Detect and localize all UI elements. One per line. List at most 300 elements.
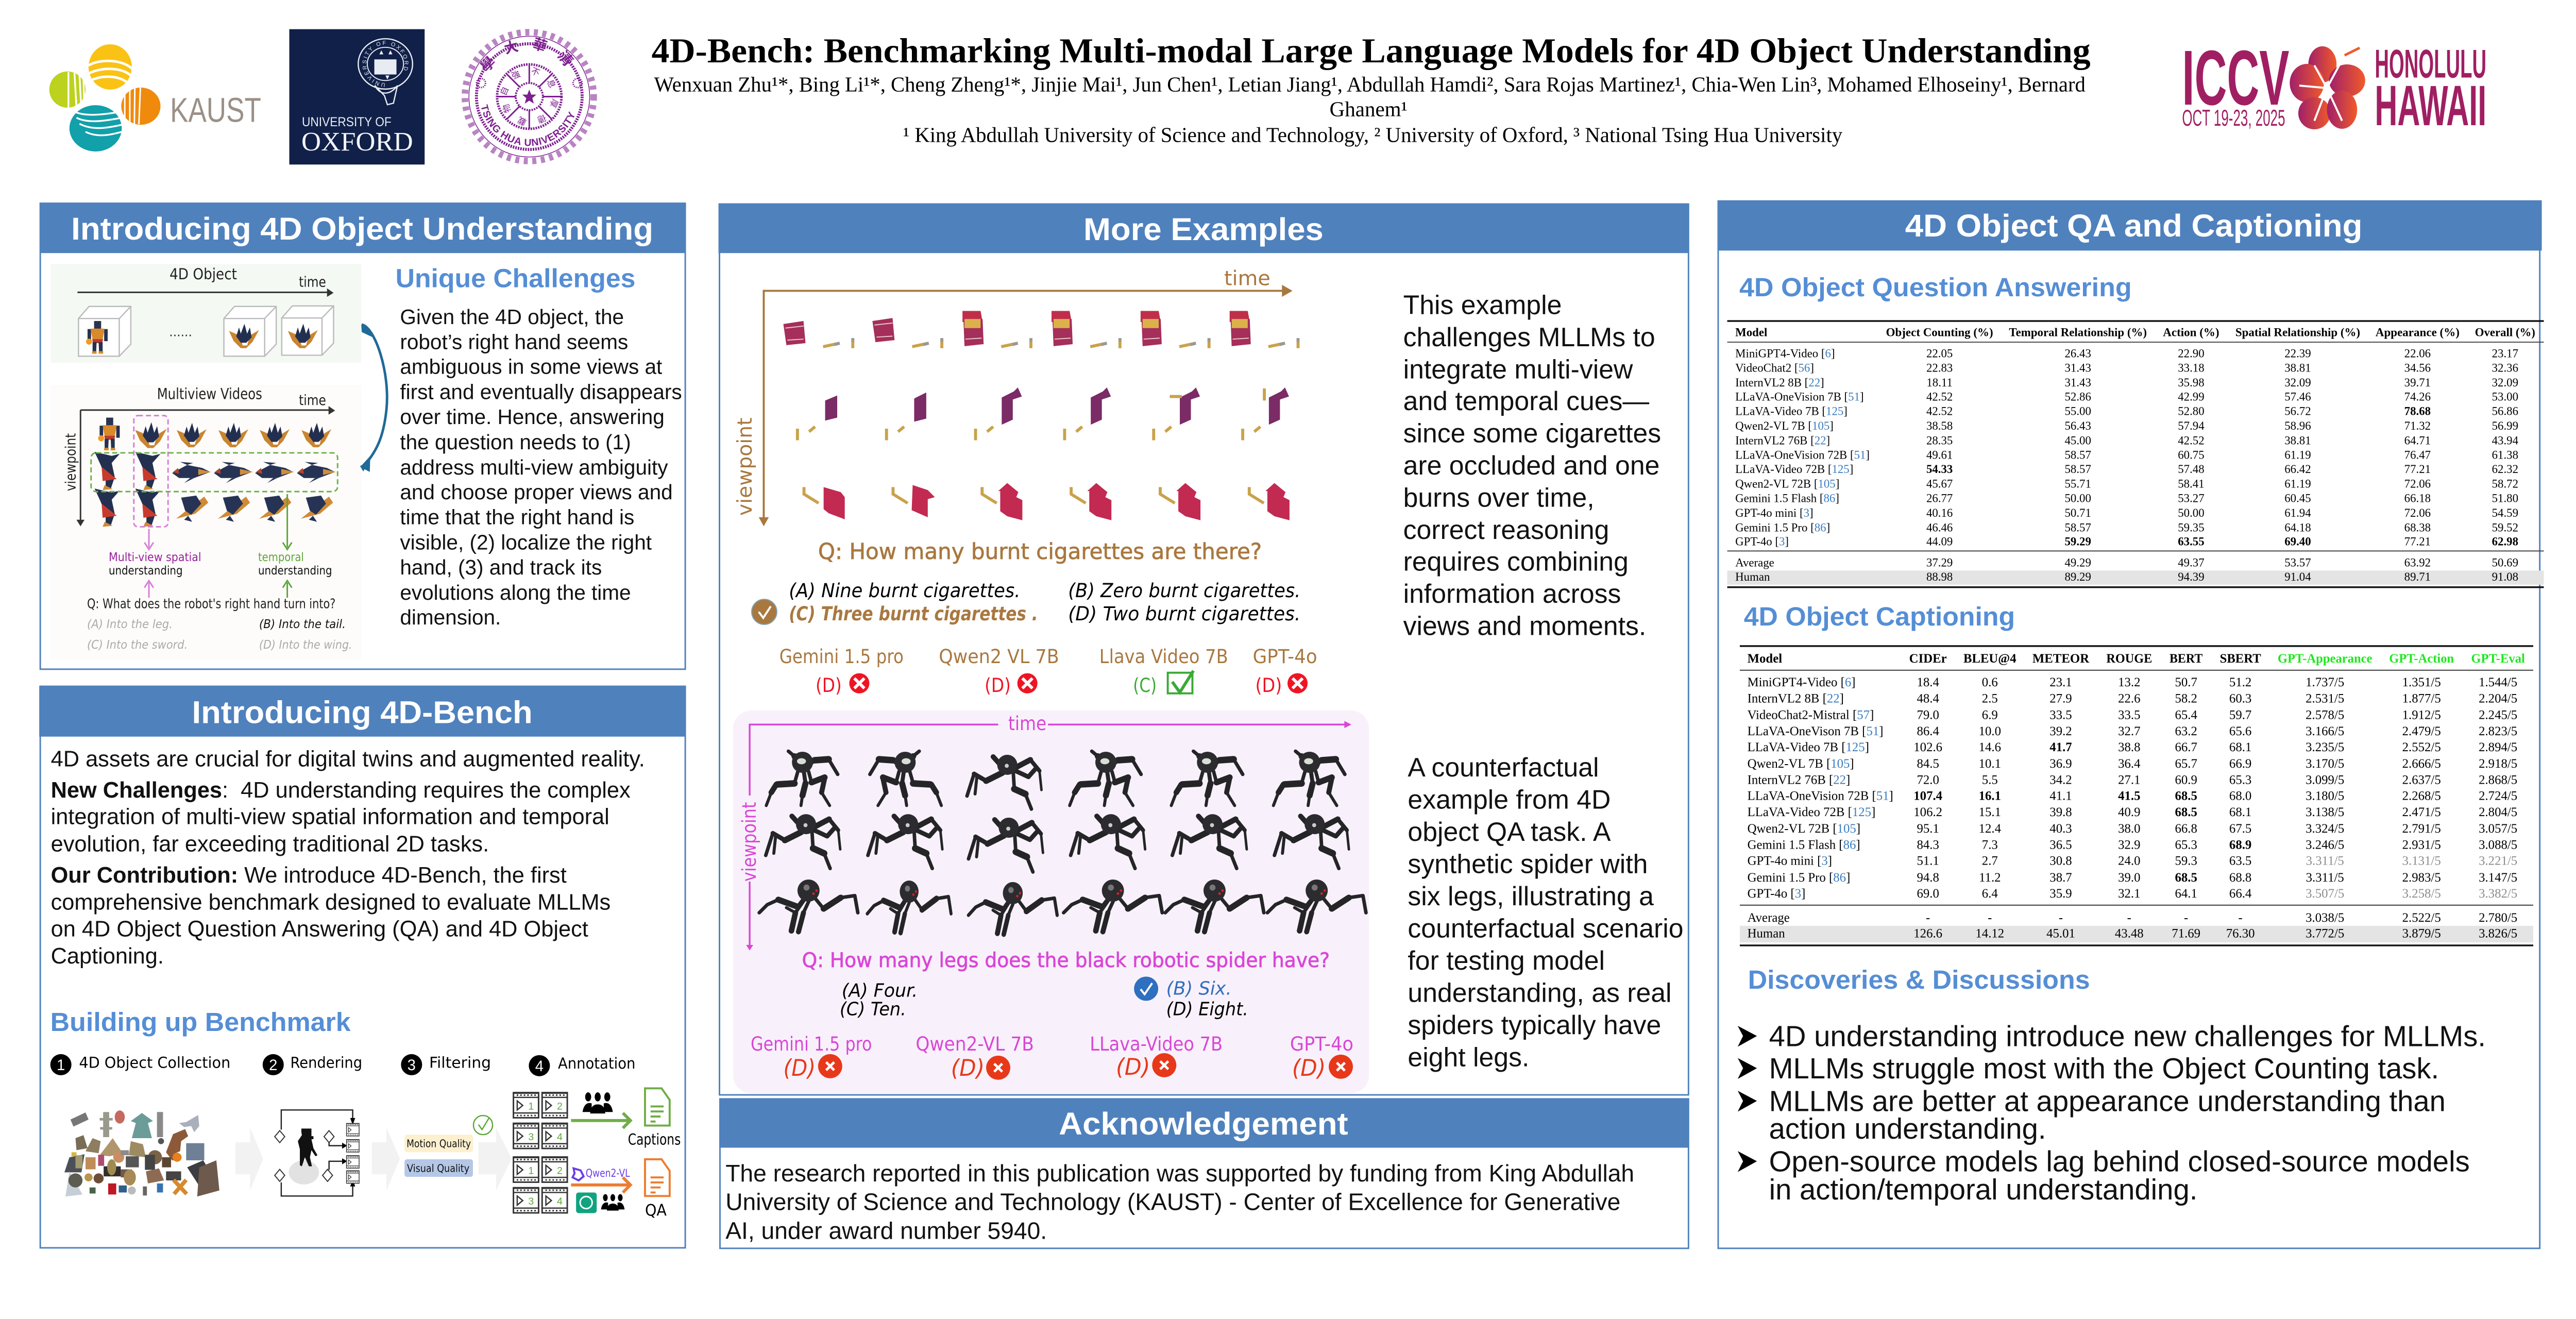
- table: captioning results: 68.1: [2229, 740, 2251, 754]
- table: captioning results: 3.099/5: [2306, 773, 2344, 787]
- table: captioning results: 23.1: [2049, 675, 2072, 689]
- table: QA results: Temporal Relationship (%): [2009, 326, 2147, 339]
- annotation: captions and QA: 2: [557, 1101, 563, 1112]
- table: QA results: 66.18: [2404, 492, 2431, 505]
- table: QA results: 57.94: [2178, 419, 2205, 432]
- table: QA results: 33.18: [2178, 362, 2205, 375]
- step labels: 2: [269, 1057, 277, 1074]
- table: captioning results: 3.057/5: [2479, 822, 2517, 836]
- logo: University of Oxford: UNIVERSITY OF OXFORD: [363, 41, 408, 87]
- table: QA results: Model: [1735, 326, 1767, 339]
- logo: KAUST: [49, 44, 261, 151]
- table: captioning results: 63.2: [2175, 724, 2197, 738]
- answer options: (B) Zero burnt cigarettes.: [1068, 580, 1300, 602]
- answer options: spider: (B) Six.: [1166, 978, 1232, 1000]
- table: QA results: 32.36: [2492, 362, 2518, 375]
- table: captioning results: 39.0: [2118, 871, 2141, 885]
- annotation: captions and QA: 1: [528, 1165, 534, 1176]
- model answers: (D): [985, 674, 1011, 697]
- figure: multiview videos: understanding: [258, 563, 332, 578]
- table: captioning results: 12.4: [1979, 822, 2002, 836]
- logo: ICCV Honolulu Hawaii: HAWAII: [2375, 74, 2486, 138]
- figure: multiview videos: time: [299, 393, 326, 409]
- model answers: spider: (D): [784, 1054, 816, 1081]
- logo: ICCV Honolulu Hawaii: [2182, 35, 2486, 138]
- table: QA results: 91.08: [2492, 570, 2518, 583]
- table: captioning results: 2.522/5: [2402, 911, 2441, 925]
- table: QA results: Qwen2-VL 7B [105]: [1735, 419, 1834, 432]
- table: QA results: 38.81: [2284, 434, 2311, 447]
- table: captioning results: 2.7: [1982, 854, 1998, 868]
- table: captioning results: 45.01: [2046, 926, 2075, 940]
- table: QA results: 62.98: [2492, 535, 2518, 548]
- table: captioning results: 7.3: [1982, 838, 1998, 852]
- text: cigarette example description: burns over time,: [1403, 482, 1595, 512]
- list: discoveries: action understanding.: [1769, 1112, 2046, 1145]
- table: captioning results: 35.9: [2049, 887, 2072, 901]
- table: QA results: LLaVA-Video 72B [125]: [1735, 463, 1853, 476]
- text: unique challenges body: address multi-view ambiguity: [400, 455, 668, 479]
- text: cigarette example description: and temporal cues—: [1403, 386, 1649, 416]
- table: captioning results: 22.6: [2118, 691, 2141, 705]
- table: QA results: 45.67: [1926, 477, 1953, 490]
- panel: introducing 4D object understanding: [40, 203, 688, 669]
- text: spider example description: for testing model: [1408, 945, 1605, 975]
- table: captioning results: 94.8: [1917, 871, 1939, 885]
- table: QA results: 61.19: [2284, 477, 2311, 490]
- table: captioning results: 2.780/5: [2479, 911, 2517, 925]
- answer options: spider: [840, 977, 1248, 1020]
- annotation: captions and QA: Captions: [628, 1131, 681, 1148]
- table: captioning results: 69.0: [1917, 887, 1939, 901]
- table: captioning results: 51.2: [2229, 675, 2251, 689]
- text: unique challenges body: visible, (2) localize the right: [400, 530, 652, 554]
- heading: acknowledgement: Acknowledgement: [1059, 1106, 1348, 1142]
- table: captioning results: 33.5: [2118, 708, 2141, 722]
- table: QA results: [1727, 321, 2544, 587]
- figure: multiview videos: (D) Into the wing.: [259, 637, 352, 652]
- table: captioning results: 2.531/5: [2306, 691, 2344, 705]
- text: unique challenges body: and choose proper views and: [400, 480, 673, 504]
- table: captioning results: 2.637/5: [2402, 773, 2441, 787]
- heading: 4D object question answering: 4D Object Question Answering: [1739, 273, 2132, 302]
- table: QA results: 32.09: [2284, 376, 2311, 389]
- text: spider example description: object QA task. A: [1408, 817, 1611, 847]
- table: QA results: 22.06: [2404, 347, 2431, 360]
- text: introduction body: evolution, far exceeding traditional 2D tasks.: [51, 832, 489, 856]
- table: captioning results: 3.324/5: [2306, 822, 2344, 836]
- model answers: spider: (D): [1116, 1053, 1150, 1080]
- table: captioning results: 68.8: [2229, 871, 2251, 885]
- table: QA results: 59.29: [2065, 535, 2091, 548]
- figure: 4D object: time: [299, 275, 326, 291]
- figure: spider counterfactual: [733, 711, 1369, 1093]
- table: QA results: 56.43: [2065, 419, 2091, 432]
- list: discoveries: in action/temporal understanding.: [1769, 1173, 2197, 1206]
- table: captioning results: 3.166/5: [2306, 724, 2344, 738]
- answer options: (C) Three burnt cigarettes .: [789, 603, 1038, 625]
- table: captioning results: 66.9: [2229, 757, 2251, 771]
- table: QA results: 55.71: [2065, 477, 2091, 490]
- table: captioning results: 1.544/5: [2479, 675, 2517, 689]
- step labels: 4D Object Collection: [79, 1054, 230, 1071]
- text: spider example description: example from 4D: [1408, 784, 1611, 814]
- table: captioning results: 3.826/5: [2479, 926, 2517, 940]
- table: captioning results: 51.1: [1917, 854, 1939, 868]
- list: discoveries: 4D understanding introduce new challenges for MLLMs.: [1769, 1020, 2486, 1052]
- text: acknowledgement body: The research reported in this publication was supported by funding from King Abdullah: [725, 1160, 1634, 1187]
- title: 4D-Bench: Benchmarking Multi-modal Large Language Models for 4D Object Understanding: [652, 31, 2091, 70]
- table: captioning results: 67.5: [2229, 822, 2251, 836]
- table: captioning results: 72.0: [1917, 773, 1939, 787]
- table: captioning results: 66.4: [2229, 887, 2252, 901]
- table: captioning results: 0.6: [1982, 675, 1998, 689]
- table: captioning results: 2.931/5: [2402, 838, 2441, 852]
- table: captioning results: Human: [1748, 926, 1785, 940]
- table: captioning results: 3.038/5: [2306, 911, 2344, 925]
- text: introduction body: integration of multi-view spatial information and temporal: [51, 805, 609, 830]
- table: captioning results: 2.666/5: [2402, 757, 2441, 771]
- table: QA results: 52.86: [2065, 390, 2091, 403]
- table: captioning results: [1740, 646, 2533, 945]
- model answers: spider: LLava-Video 7B: [1090, 1033, 1223, 1055]
- table: captioning results: 68.0: [2229, 789, 2251, 803]
- table: captioning results: 2.804/5: [2479, 805, 2517, 819]
- model answers: spider: (D): [1292, 1054, 1326, 1081]
- table: captioning results: 15.1: [1979, 805, 2001, 819]
- table: captioning results: 24.0: [2118, 854, 2141, 868]
- table: QA results: 77.21: [2404, 463, 2431, 476]
- text: unique challenges body: Given the 4D object, the: [400, 305, 624, 329]
- table: captioning results: 2.5: [1982, 691, 1998, 705]
- table: captioning results: 41.5: [2118, 789, 2141, 803]
- table: captioning results: 3.180/5: [2306, 789, 2344, 803]
- table: captioning results: Gemini 1.5 Pro [86]: [1748, 871, 1850, 885]
- table: captioning results: 3.879/5: [2402, 926, 2441, 940]
- table: QA results: Human: [1735, 570, 1770, 583]
- table: captioning results: 2.552/5: [2402, 740, 2441, 754]
- text: spider example description: synthetic spider with: [1408, 849, 1648, 878]
- table: QA results: 61.94: [2284, 506, 2311, 519]
- table: captioning results: 65.4: [2175, 708, 2197, 722]
- table: captioning results: 58.2: [2175, 691, 2197, 705]
- table: QA results: 53.57: [2284, 556, 2311, 569]
- table: QA results: 52.80: [2178, 405, 2205, 418]
- table: captioning results: 36.4: [2118, 757, 2141, 771]
- model answers: GPT-4o: [1253, 646, 1317, 668]
- table: captioning results: 3.131/5: [2402, 854, 2441, 868]
- panel: acknowledgement: [719, 1099, 1689, 1248]
- table: captioning results: GPT-4o mini [3]: [1748, 854, 1832, 868]
- table: QA results: 58.72: [2492, 477, 2518, 490]
- table: captioning results: 1.912/5: [2402, 708, 2441, 722]
- table: captioning results: 68.9: [2229, 838, 2251, 852]
- table: captioning results: 126.6: [1913, 926, 1942, 940]
- text: cigarette example description: requires combining: [1403, 546, 1629, 576]
- table: QA results: 38.81: [2284, 362, 2311, 375]
- table: QA results: 22.90: [2178, 347, 2205, 360]
- table: captioning results: 48.4: [1917, 691, 1939, 705]
- table: QA results: 62.32: [2492, 463, 2518, 476]
- table: captioning results: 2.983/5: [2402, 871, 2441, 885]
- table: captioning results: 36.9: [2049, 757, 2072, 771]
- panel: more examples: [719, 204, 1691, 1095]
- table: captioning results: 1.737/5: [2306, 675, 2344, 689]
- figure: cigarettes multi-view: time: [1224, 267, 1270, 291]
- table: captioning results: 68.5: [2175, 871, 2197, 885]
- heading: more examples: More Examples: [1083, 212, 1324, 247]
- text: unique challenges body: time that the right hand is: [400, 505, 634, 529]
- table: captioning results: 65.6: [2229, 724, 2251, 738]
- answer options: spider: (C) Ten.: [840, 999, 906, 1020]
- table: captioning results: 2.791/5: [2402, 822, 2441, 836]
- figure: multiview videos: Multi-view spatial: [109, 550, 201, 564]
- table: QA results: Spatial Relationship (%): [2235, 326, 2360, 339]
- annotation: captions and QA: Qwen2-VL: [586, 1167, 630, 1180]
- table: QA results: 59.52: [2492, 521, 2518, 534]
- table: captioning results: 1.351/5: [2402, 675, 2441, 689]
- table: captioning results: -: [1988, 911, 1992, 925]
- table: QA results: 31.43: [2065, 376, 2091, 389]
- table: captioning results: -: [2127, 911, 2131, 925]
- table: captioning results: 106.2: [1913, 805, 1942, 819]
- table: captioning results: 1.877/5: [2402, 691, 2441, 705]
- annotation: captions and QA: 3: [528, 1196, 534, 1207]
- table: QA results: 43.94: [2492, 434, 2519, 447]
- text: spider example description: counterfactual scenario: [1408, 913, 1683, 943]
- table: captioning results: LLaVA-OneVison 7B [51]: [1748, 724, 1884, 738]
- table: QA results: 78.68: [2404, 405, 2431, 418]
- table: captioning results: 40.3: [2049, 822, 2072, 836]
- figure: multiview videos: (B) Into the tail.: [259, 617, 346, 631]
- table: QA results: 60.75: [2178, 449, 2205, 462]
- list: discoveries: Open-source models lag behind closed-source models: [1769, 1145, 2470, 1177]
- table: QA results: LLaVA-Video 7B [125]: [1735, 405, 1848, 418]
- step labels: 4: [535, 1058, 544, 1075]
- table: QA results: 28.35: [1926, 434, 1953, 447]
- answer options: (D) Two burnt cigarettes.: [1068, 603, 1300, 625]
- table: captioning results: 59.7: [2229, 708, 2251, 722]
- logo: ICCV Honolulu Hawaii: ICCV: [2182, 35, 2289, 122]
- text: unique challenges body: the question needs to (1): [400, 430, 631, 454]
- table: captioning results: 39.8: [2049, 805, 2072, 819]
- table: QA results: 58.57: [2065, 521, 2091, 534]
- icon: correct answer check: [752, 599, 777, 624]
- table: QA results: 18.11: [1926, 376, 1953, 389]
- text: acknowledgement body: AI, under award number 5940.: [725, 1217, 1047, 1244]
- text: cigarette example description: challenges MLLMs to: [1403, 322, 1655, 352]
- table: QA results: VideoChat2 [56]: [1735, 362, 1814, 375]
- panel: 4D object QA and captioning: [1718, 200, 2544, 1248]
- table: captioning results: 2.245/5: [2479, 708, 2517, 722]
- table: QA results: 50.00: [2065, 492, 2091, 505]
- table: captioning results: LLaVA-Video 72B [125]: [1748, 805, 1875, 819]
- table: captioning results: Average: [1748, 911, 1790, 925]
- table: captioning results: LLaVA-OneVision 72B [51]: [1748, 789, 1893, 803]
- figure: multiview videos: (C) Into the sword.: [87, 637, 188, 652]
- figure: 4D object: ......: [169, 325, 192, 339]
- table: captioning results: 2.268/5: [2402, 789, 2441, 803]
- table: QA results: 61.19: [2284, 449, 2311, 462]
- step labels: 3: [408, 1057, 416, 1074]
- table: QA results: 69.40: [2284, 535, 2311, 548]
- logo: University of Oxford: UNIVERSITY OF: [302, 115, 392, 129]
- table: QA results: 22.39: [2284, 347, 2311, 360]
- table: QA results: 32.09: [2492, 376, 2518, 389]
- table: captioning results: 63.5: [2229, 854, 2251, 868]
- table: captioning results: 32.1: [2118, 887, 2141, 901]
- table: QA results: 42.52: [2178, 434, 2205, 447]
- table: QA results: Appearance (%): [2376, 326, 2460, 339]
- authors: [654, 73, 2086, 146]
- panel: introducing 4D-Bench: [39, 686, 685, 1248]
- table: captioning results: 66.8: [2175, 822, 2197, 836]
- text: unique challenges body: dimension.: [400, 605, 501, 629]
- table: QA results: 58.96: [2284, 419, 2311, 432]
- figure: cigarettes multi-view: [734, 267, 1317, 697]
- table: QA results: 72.06: [2404, 477, 2431, 490]
- table: captioning results: CIDEr: [1909, 652, 1947, 666]
- table: QA results: 42.52: [1926, 405, 1953, 418]
- table: QA results: MiniGPT4-Video [6]: [1735, 347, 1835, 360]
- table: captioning results: 60.3: [2229, 691, 2251, 705]
- table: QA results: 49.61: [1926, 449, 1953, 462]
- table: captioning results: 32.7: [2118, 724, 2141, 738]
- table: QA results: 26.43: [2065, 347, 2091, 360]
- table: QA results: 50.69: [2492, 556, 2518, 569]
- table: captioning results: -: [2239, 911, 2243, 925]
- figure: multiview videos: understanding: [109, 563, 182, 578]
- text: unique challenges body: first and eventually disappears: [400, 380, 682, 403]
- model answers: spider: Qwen2-VL 7B: [916, 1033, 1034, 1055]
- table: QA results: 58.41: [2178, 477, 2205, 490]
- table: QA results: 54.33: [1926, 463, 1953, 476]
- heading: unique challenges: Unique Challenges: [396, 264, 635, 293]
- table: QA results: 89.71: [2404, 570, 2431, 583]
- figure: 4D object: 4D Object: [170, 265, 237, 283]
- table: QA results: 63.92: [2404, 556, 2431, 569]
- table: captioning results: 107.4: [1913, 789, 1942, 803]
- table: captioning results: 76.30: [2226, 926, 2255, 940]
- table: captioning results: 43.48: [2115, 926, 2144, 940]
- table: QA results: 66.42: [2284, 463, 2311, 476]
- text: spider example description: eight legs.: [1408, 1042, 1529, 1072]
- table: captioning results: METEOR: [2032, 652, 2090, 666]
- model answers: spider: Gemini 1.5 pro: [751, 1033, 872, 1055]
- table: QA results: 68.38: [2404, 521, 2431, 534]
- table: captioning results: 102.6: [1913, 740, 1942, 754]
- heading: 4D object captioning: 4D Object Captioning: [1744, 602, 2015, 631]
- table: QA results: 64.18: [2284, 521, 2311, 534]
- table: QA results: InternVL2 8B [22]: [1735, 376, 1824, 389]
- table: QA results: Gemini 1.5 Pro [86]: [1735, 521, 1830, 534]
- table: QA results: 39.71: [2404, 376, 2431, 389]
- table: QA results: Gemini 1.5 Flash [86]: [1735, 492, 1839, 505]
- figure: multiview videos: Q: What does the robot's right hand turn into?: [87, 596, 335, 612]
- table: captioning results: Gemini 1.5 Flash [86]: [1748, 838, 1860, 852]
- filter boxes: [404, 1115, 493, 1177]
- table: captioning results: -: [2059, 911, 2063, 925]
- table: captioning results: 40.9: [2118, 805, 2141, 819]
- text: unique challenges body: over time. Hence, answering: [400, 405, 665, 429]
- table: captioning results: 68.1: [2229, 805, 2251, 819]
- table: QA results: 42.52: [1926, 390, 1953, 403]
- table: QA results: 91.04: [2284, 570, 2311, 583]
- table: QA results: 35.98: [2178, 376, 2205, 389]
- answer options: [789, 580, 1300, 625]
- table: captioning results: 10.1: [1979, 757, 2001, 771]
- text: introduction body: We introduce 4D-Bench, the first: [238, 863, 567, 888]
- table: captioning results: 30.8: [2049, 854, 2072, 868]
- table: captioning results: 27.1: [2118, 773, 2141, 787]
- table: captioning results: MiniGPT4-Video [6]: [1748, 675, 1856, 689]
- table: captioning results: 3.258/5: [2402, 887, 2441, 901]
- figure: spider counterfactual: time: [1008, 713, 1046, 735]
- table: captioning results: 2.724/5: [2479, 789, 2517, 803]
- table: captioning results: 65.3: [2229, 773, 2251, 787]
- table: captioning results: 3.772/5: [2306, 926, 2344, 940]
- text: cigarette example description: This example: [1403, 290, 1562, 319]
- table: QA results: 34.56: [2404, 362, 2431, 375]
- table: captioning results: 3.311/5: [2306, 871, 2344, 885]
- table: captioning results: GPT-4o [3]: [1748, 887, 1805, 901]
- table: captioning results: 5.5: [1982, 773, 1998, 787]
- filter boxes: Visual Quality: [407, 1162, 469, 1174]
- text: cigarette example description: information across: [1403, 579, 1621, 608]
- table: captioning results: 95.1: [1917, 822, 1939, 836]
- table: captioning results: 79.0: [1917, 708, 1939, 722]
- table: captioning results: 2.471/5: [2402, 805, 2441, 819]
- table: captioning results: Qwen2-VL 7B [105]: [1748, 757, 1854, 771]
- table: QA results: 57.48: [2178, 463, 2205, 476]
- logo: Tsing Hua University: 自強不息厚德載物: [500, 67, 558, 126]
- table: captioning results: 60.9: [2175, 773, 2197, 787]
- table: QA results: 44.09: [1926, 535, 1953, 548]
- table: captioning results: -: [2184, 911, 2188, 925]
- step labels: 1: [57, 1057, 65, 1074]
- step labels: Annotation: [558, 1055, 635, 1072]
- text: cigarette example description: correct reasoning: [1403, 515, 1609, 545]
- table: QA results: 22.83: [1926, 362, 1953, 375]
- annotation: captions and QA: [513, 1088, 681, 1220]
- heading: building up benchmark: Building up Benchmark: [50, 1007, 351, 1037]
- table: QA results: 49.37: [2178, 556, 2205, 569]
- table: captioning results: 3.235/5: [2306, 740, 2344, 754]
- heading: introducing 4D object understanding: Introducing 4D Object Understanding: [71, 211, 653, 247]
- table: captioning results: 11.2: [1979, 871, 2001, 885]
- annotation: captions and QA: 4: [557, 1131, 563, 1143]
- table: captioning results: 41.1: [2049, 789, 2072, 803]
- table: captioning results: Model: [1748, 652, 1782, 666]
- figure: multiview videos: (A) Into the leg.: [87, 617, 173, 631]
- table: captioning results: 68.5: [2175, 805, 2197, 819]
- logo: University of Oxford: OXFORD: [301, 127, 413, 157]
- model answers: (D): [816, 674, 842, 697]
- figure: multiview videos: viewpoint: [63, 433, 79, 491]
- answer options: spider: (D) Eight.: [1166, 999, 1248, 1020]
- table: QA results: 64.71: [2404, 434, 2431, 447]
- table: QA results: 37.29: [1926, 556, 1953, 569]
- table: captioning results: 2.823/5: [2479, 724, 2517, 738]
- table: captioning results: BLEU@4: [1963, 652, 2016, 666]
- table: QA results: 38.58: [1926, 419, 1953, 432]
- table: captioning results: InternVL2 8B [22]: [1748, 691, 1844, 705]
- table: captioning results: 14.12: [1975, 926, 2004, 940]
- table: QA results: LLaVA-OneVision 7B [51]: [1735, 390, 1864, 403]
- step labels: [50, 1054, 635, 1076]
- step labels: Filtering: [429, 1054, 491, 1071]
- table: captioning results: 3.311/5: [2306, 854, 2344, 868]
